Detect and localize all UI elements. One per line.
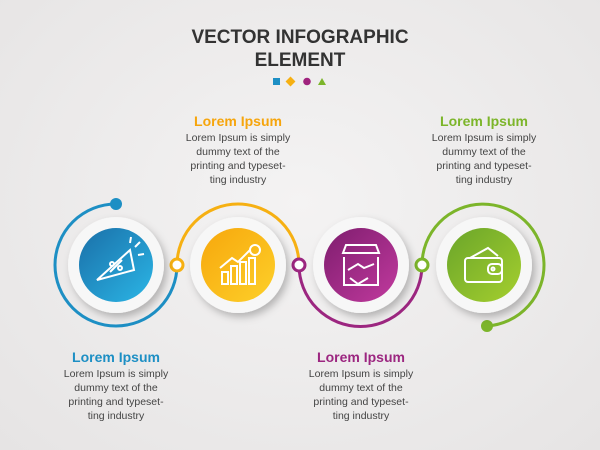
text 4: Lorem Ipsum is simply bbox=[432, 132, 536, 144]
text 2: dummy text of the bbox=[196, 146, 280, 158]
text 4: dummy text of the bbox=[442, 146, 526, 158]
text 1 bbox=[64, 349, 168, 422]
text 1: Lorem Ipsum is simply bbox=[64, 368, 168, 380]
text 4: printing and typeset- bbox=[436, 160, 532, 172]
circle 4 bbox=[436, 217, 532, 313]
text 2: ting industry bbox=[210, 174, 266, 186]
text 4 bbox=[432, 113, 536, 186]
circle 3 bbox=[313, 217, 409, 313]
circle 1 bbox=[68, 217, 164, 313]
text 3: Lorem Ipsum is simply bbox=[309, 368, 413, 380]
arcs bbox=[55, 204, 544, 326]
text 2: printing and typeset- bbox=[190, 160, 286, 172]
text 3: dummy text of the bbox=[319, 382, 403, 394]
text 3: Lorem Ipsum bbox=[317, 349, 405, 365]
circle 2 bbox=[190, 217, 286, 313]
text 1: ting industry bbox=[88, 410, 144, 422]
text 1: Lorem Ipsum bbox=[72, 349, 160, 365]
text 2 bbox=[186, 113, 290, 186]
legend shapes bbox=[273, 76, 326, 86]
text 4: ting industry bbox=[456, 174, 512, 186]
text 4: Lorem Ipsum bbox=[440, 113, 528, 129]
connectors bbox=[171, 259, 428, 271]
title bbox=[191, 27, 409, 71]
title: ELEMENT bbox=[255, 50, 345, 71]
text 2: Lorem Ipsum bbox=[194, 113, 282, 129]
text 2: Lorem Ipsum is simply bbox=[186, 132, 290, 144]
text 3: printing and typeset- bbox=[313, 396, 409, 408]
text 3 bbox=[309, 349, 414, 422]
title: VECTOR INFOGRAPHIC bbox=[191, 27, 409, 48]
text 1: dummy text of the bbox=[74, 382, 158, 394]
text 1: printing and typeset- bbox=[68, 396, 164, 408]
text 3: ting industry bbox=[333, 410, 389, 422]
